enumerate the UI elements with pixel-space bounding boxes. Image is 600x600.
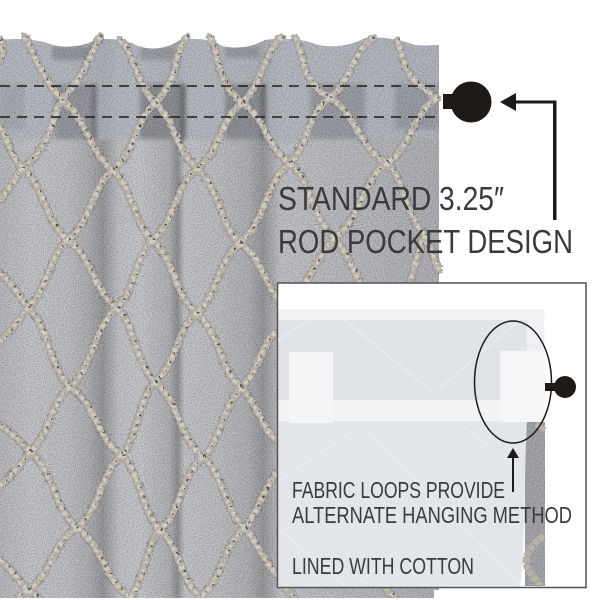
heading: standard rod pocket design: STANDARD 3.25″ <box>278 181 504 218</box>
fabric weave texture <box>0 30 439 600</box>
rod pocket dashed lines <box>0 86 440 117</box>
lattice fringe pattern <box>0 36 440 598</box>
panel: fabric loops inset <box>278 283 586 588</box>
fabric loop: right <box>500 351 545 422</box>
arrow: up to fabric loop <box>507 448 519 492</box>
cotton lining <box>278 309 545 586</box>
arrow: from label to rod <box>500 93 556 220</box>
highlight ellipse <box>474 321 552 443</box>
icon: curtain rod end <box>443 82 492 122</box>
text: fabric loops: FABRIC LOOPS PROVIDE <box>292 477 505 503</box>
heading: standard rod pocket design <box>278 181 573 261</box>
curtain edge behind lining <box>525 421 545 586</box>
fabric loop: left <box>289 352 333 423</box>
inset background and border <box>278 283 586 588</box>
icon: small rod end <box>545 376 576 398</box>
curtain fabric with vertical folds <box>0 30 439 600</box>
pleat shading at top and rod pocket band <box>0 40 439 140</box>
text: lined with cotton: LINED WITH COTTON <box>292 553 474 579</box>
text: fabric loops <box>292 477 572 528</box>
